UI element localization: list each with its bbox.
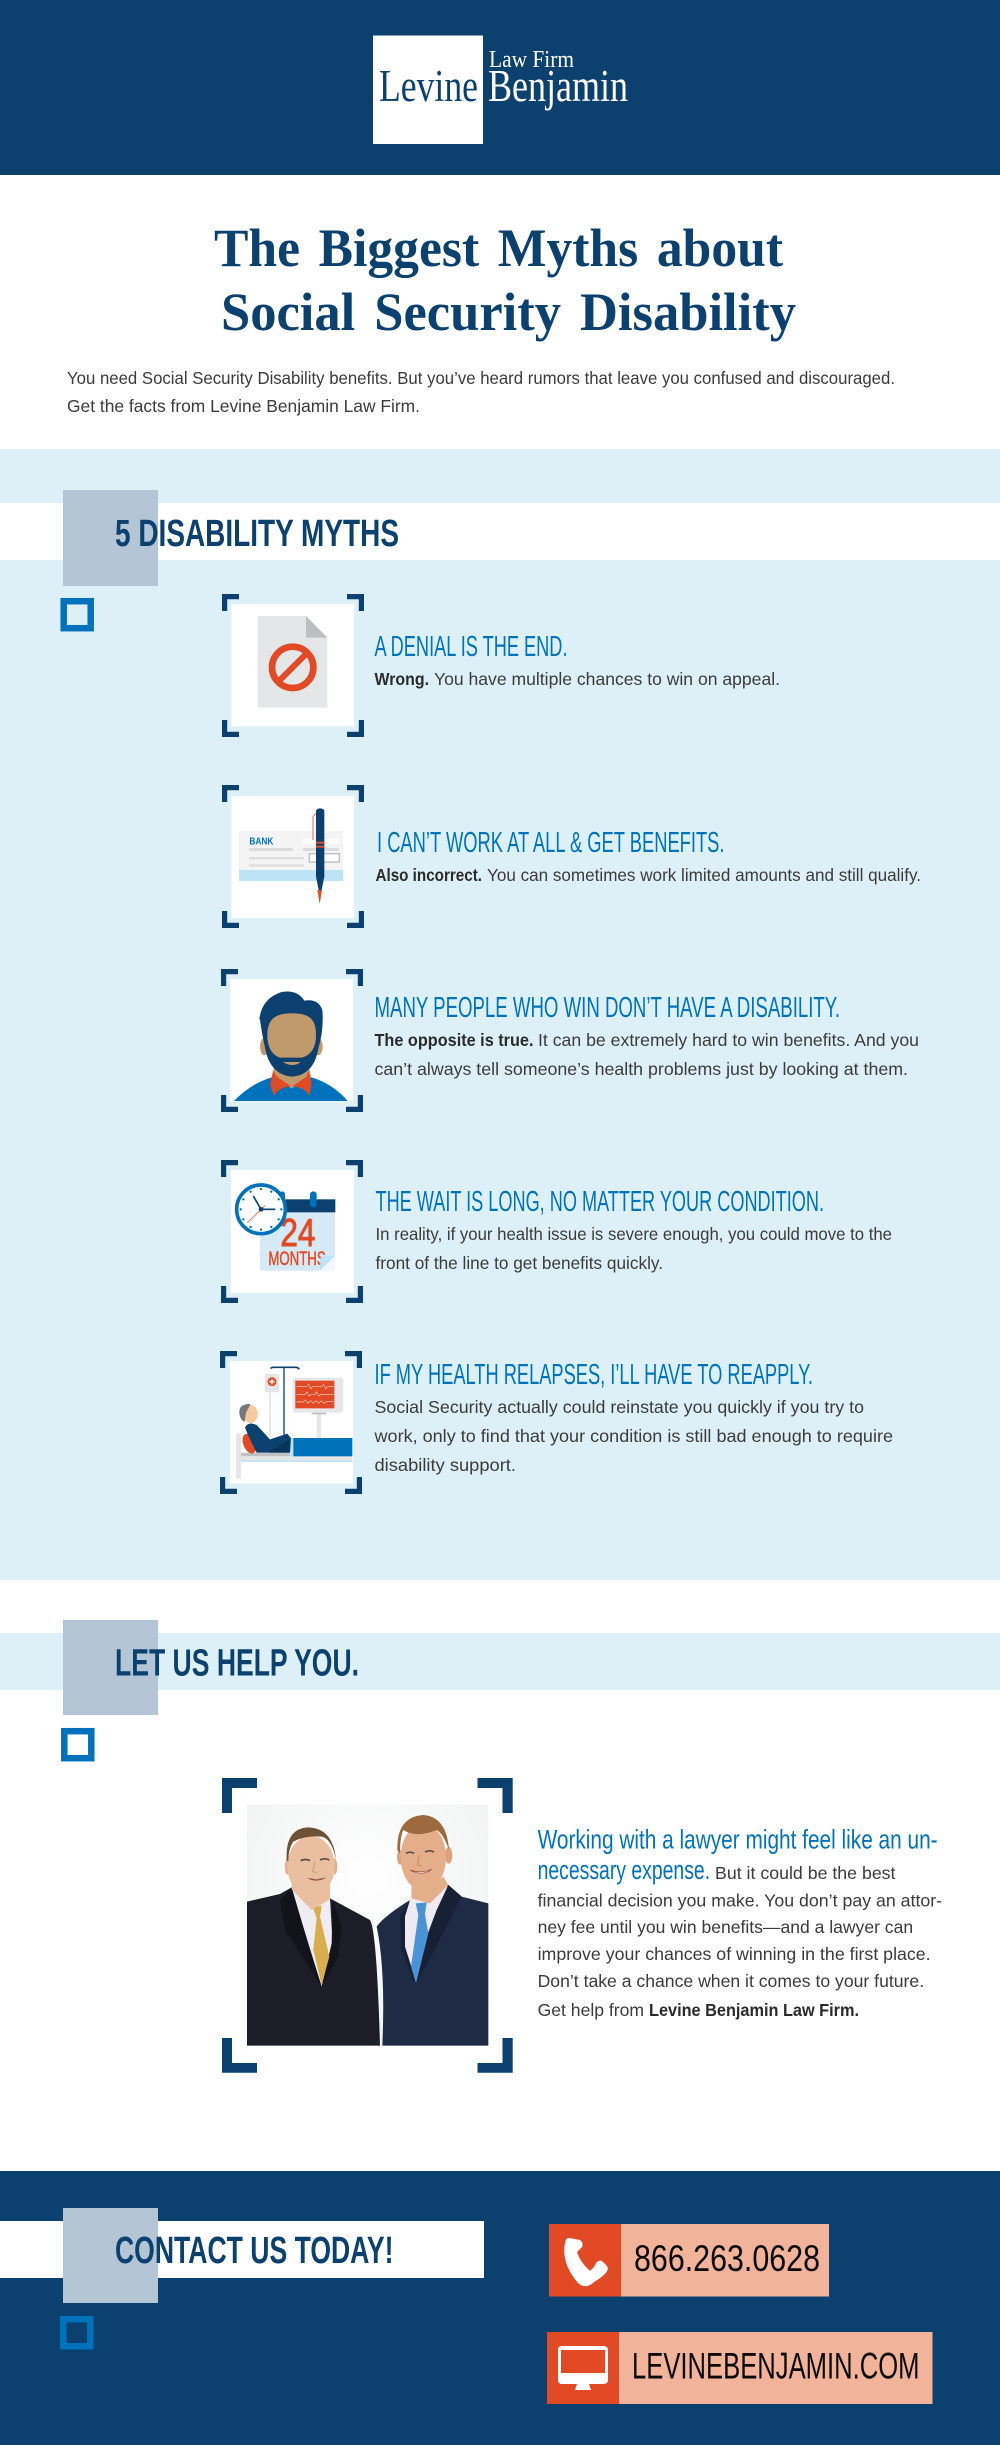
panel: 5 disability myths background <box>0 449 1000 1580</box>
help text: necessary expense. <box>538 1855 710 1885</box>
myth 1 <box>222 594 780 737</box>
myth 3: can’t always tell someone’s health problems just by looking at them. <box>374 1059 908 1079</box>
photo: two attorneys <box>247 1804 488 2046</box>
myth 3: The opposite is true. <box>374 1030 534 1050</box>
icon: telephone <box>564 2238 608 2286</box>
title: Social Security Disability <box>221 282 796 342</box>
myth 5 <box>220 1351 893 1494</box>
title <box>214 218 796 342</box>
website button <box>547 2332 932 2404</box>
myth 4: In reality, if your health issue is severe enough, you could move to the <box>376 1224 892 1244</box>
myth 5: work, only to find that your condition is still bad enough to require <box>373 1426 893 1446</box>
section heading: contact us today <box>0 2208 484 2346</box>
help text: Don’t take a chance when it comes to your future. <box>538 1971 924 1991</box>
icon: patient in hospital bed <box>236 1367 352 1478</box>
myth 1: Wrong. <box>374 669 429 689</box>
phone button: 866.263.0628 <box>634 2238 820 2279</box>
icon: clock and calendar: 24 <box>280 1211 315 1255</box>
header band with logo: Law Firm <box>489 47 574 73</box>
panel: contact footer <box>0 2171 1000 2445</box>
icon: computer monitor <box>558 2346 608 2390</box>
section heading: let us help you <box>0 1620 1000 1758</box>
myth 2: I CAN’T WORK AT ALL & GET BENEFITS. <box>377 827 724 859</box>
photo frame with attorneys <box>222 1778 513 2073</box>
myth 4 <box>221 1160 892 1303</box>
section heading: contact us today: CONTACT US TODAY! <box>115 2230 394 2272</box>
myth 2: You can sometimes work limited amounts and still qualify. <box>487 865 921 885</box>
myth 5: Social Security actually could reinstate you quickly if you try to <box>374 1397 864 1417</box>
phone button <box>549 2224 829 2296</box>
intro text <box>67 368 895 416</box>
help text: Get help from <box>538 2000 644 2020</box>
myth 2 <box>222 785 921 928</box>
myth 2: Also incorrect. <box>376 865 482 885</box>
help text: financial decision you make. You don’t pay an attor- <box>538 1890 942 1910</box>
title: The Biggest Myths about <box>214 218 783 278</box>
icon: bearded man <box>234 991 348 1101</box>
intro text: Get the facts from Levine Benjamin Law Firm. <box>67 396 420 416</box>
icon: denied document <box>258 616 327 708</box>
header band with logo <box>0 0 1000 175</box>
section heading: 5 disability myths: 5 DISABILITY MYTHS <box>115 513 399 555</box>
section heading: let us help you: LET US HELP YOU. <box>115 1642 359 1684</box>
section heading: 5 disability myths <box>0 490 1000 628</box>
header band with logo: Benjamin <box>488 61 628 111</box>
help text: ney fee until you win benefits—and a lawyer can <box>538 1917 913 1937</box>
myth 3: It can be extremely hard to win benefits. And you <box>538 1030 919 1050</box>
myth 1: A DENIAL IS THE END. <box>374 631 568 663</box>
help text: But it could be the best <box>715 1863 896 1883</box>
help text: improve your chances of winning in the first place. <box>538 1944 931 1964</box>
help text: Levine Benjamin Law Firm. <box>649 2000 859 2020</box>
help text <box>538 1824 942 2020</box>
myth 3 <box>221 969 919 1112</box>
icon: clock and calendar <box>237 1185 335 1271</box>
myth 1: You have multiple chances to win on appeal. <box>434 669 780 689</box>
header band with logo: Levine <box>379 61 478 111</box>
icon: clock and calendar: MONTHS <box>268 1249 326 1270</box>
myth 4: front of the line to get benefits quickly. <box>376 1253 663 1273</box>
icon: bank check and pen <box>239 808 343 904</box>
intro text: You need Social Security Disability benefits. But you’ve heard rumors that leave you confused and discouraged. <box>67 368 895 388</box>
myth 5: disability support. <box>374 1455 516 1475</box>
icon: bank check and pen: BANK <box>249 837 273 848</box>
